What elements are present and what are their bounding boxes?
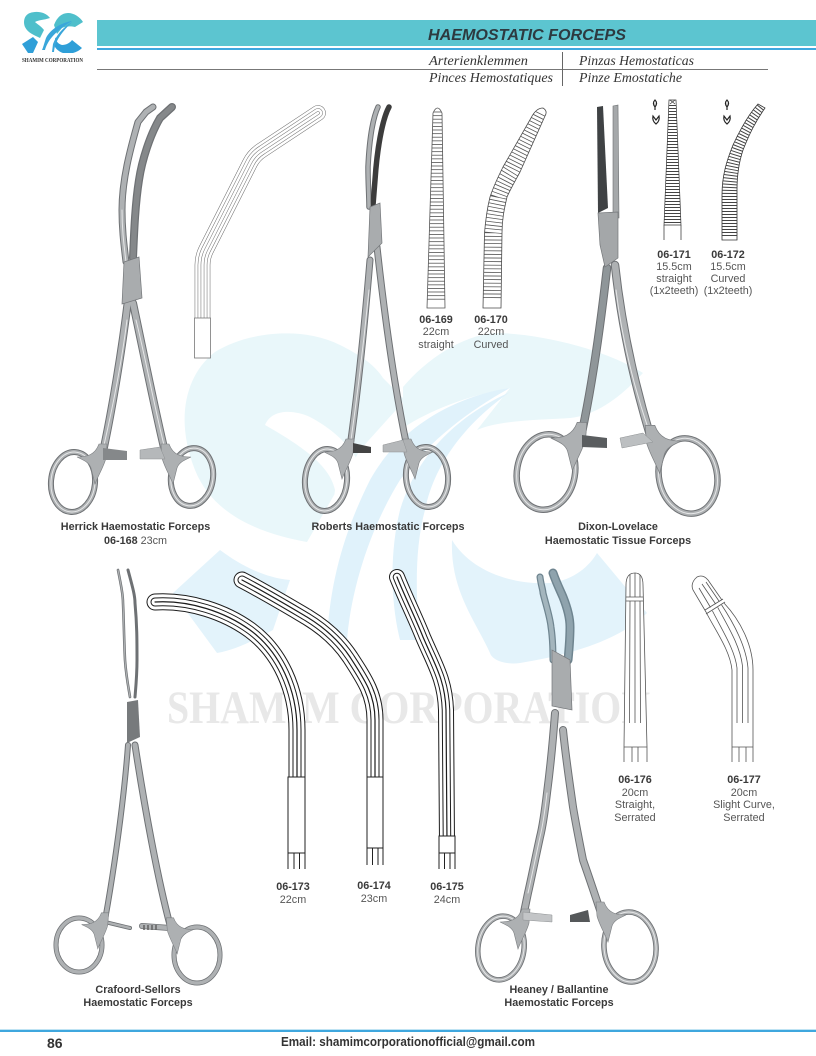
labels: 06-172 [704, 249, 752, 297]
jaw detail: 06-173 [155, 602, 305, 869]
contact email: Email: shamimcorporationofficial@gmail.com [281, 1035, 535, 1049]
labels: 06-175: 24cm [434, 894, 460, 906]
labels: 06-172: 15.5cm [710, 261, 746, 273]
multilingual subtitles: Pinze Emostatiche [578, 71, 682, 86]
company logo: SHAMIM CORPORATION [22, 58, 84, 64]
caption: Dixon-Lovelace [545, 521, 691, 547]
caption: Crafoord-Sellors: Crafoord-Sellors [95, 984, 181, 996]
labels: 06-177: 06-177 [727, 774, 761, 786]
jaw detail: 06-174 [242, 580, 383, 865]
page number: 86 [47, 1035, 63, 1051]
labels: 06-175: 06-175 [430, 881, 464, 893]
labels: 06-174: 06-174 [357, 880, 391, 892]
caption: Crafoord-Sellors [83, 984, 193, 1009]
labels: 06-169: 22cm [423, 326, 449, 338]
multilingual subtitles: Pinzas Hemostaticas [578, 54, 695, 69]
forceps: Dixon-Lovelace [511, 105, 724, 519]
multilingual subtitles: Arterienklemmen [428, 54, 528, 69]
company logo [22, 12, 84, 64]
jaw detail: 06-177 [692, 576, 753, 762]
labels: 06-171: straight [656, 273, 692, 285]
labels: 06-177 [713, 774, 775, 824]
jaw detail: 06-171 straight with teeth [664, 100, 681, 240]
labels: 06-173: 06-173 [276, 881, 310, 893]
labels: 06-172: (1x2teeth) [704, 285, 752, 297]
forceps: Crafoord-Sellors [56, 570, 220, 983]
footer rule [0, 1029, 816, 1032]
labels: 06-169 [418, 314, 454, 351]
multilingual subtitles: Pinces Hemostatiques [428, 71, 554, 86]
labels: 06-177: Slight Curve, [713, 799, 775, 811]
labels: 06-170: Curved [474, 339, 508, 351]
caption: Heaney / Ballantine [504, 984, 614, 1009]
labels: 06-176: Serrated [614, 812, 656, 824]
labels: 06-171 [650, 249, 698, 297]
labels: 06-176: 20cm [622, 787, 648, 799]
jaw detail: Herrick 06-168 [194, 113, 318, 358]
labels: 06-172: Curved [711, 273, 745, 285]
icon: tooth detail 06-172 [724, 100, 730, 124]
labels: 06-171: 06-171 [657, 249, 691, 261]
caption: Herrick [61, 521, 210, 547]
jaw detail: 06-170 curved [483, 108, 546, 308]
labels: 06-169: 06-169 [419, 314, 453, 326]
background watermark logo [173, 333, 647, 663]
caption: Herrick: Herrick Haemostatic Forceps [61, 521, 210, 533]
forceps: Roberts [302, 107, 451, 513]
labels: 06-172: 06-172 [711, 249, 745, 261]
background watermark text: SHAMIM CORPORATION [167, 682, 650, 734]
labels: 06-174: 23cm [361, 893, 387, 905]
labels: 06-177: 20cm [731, 787, 757, 799]
labels: 06-170: 22cm [478, 326, 504, 338]
labels: 06-176: 06-176 [618, 774, 652, 786]
labels: 06-173 [276, 881, 310, 906]
caption: Dixon-Lovelace: Haemostatic Tissue Forceps [545, 535, 691, 547]
caption: Dixon-Lovelace: Dixon-Lovelace [578, 521, 658, 533]
caption: Herrick: 06-168 23cm [104, 535, 167, 547]
caption: Heaney / Ballantine: Haemostatic Forceps [504, 997, 614, 1009]
caption: Crafoord-Sellors: Haemostatic Forceps [83, 997, 193, 1009]
jaw detail: 06-169 straight [427, 108, 445, 308]
caption: Heaney / Ballantine: Heaney / Ballantine [509, 984, 609, 996]
jaw detail: 06-175 [397, 577, 455, 869]
labels: 06-176 [614, 774, 656, 824]
labels: 06-177: Serrated [723, 812, 765, 824]
forceps: Herrick [48, 107, 217, 514]
labels: 06-175 [430, 881, 464, 906]
labels: 06-176: Straight, [615, 799, 655, 811]
multilingual subtitles [428, 54, 695, 86]
jaw detail: 06-176 [624, 573, 647, 762]
forceps: Heaney / Ballantine [474, 573, 659, 984]
labels: 06-174 [357, 880, 391, 905]
labels: 06-169: straight [418, 339, 454, 351]
jaw detail: 06-172 curved with teeth [722, 104, 765, 240]
labels: 06-173: 22cm [280, 894, 306, 906]
labels: 06-171: 15.5cm [656, 261, 692, 273]
labels: 06-171: (1x2teeth) [650, 285, 698, 297]
labels: 06-170: 06-170 [474, 314, 508, 326]
labels: 06-170 [474, 314, 508, 351]
title: HAEMOSTATIC FORCEPS [428, 27, 626, 44]
header band [97, 20, 816, 86]
icon: tooth detail 06-171 [653, 100, 659, 124]
caption: Roberts: Roberts Haemostatic Forceps [311, 521, 465, 533]
